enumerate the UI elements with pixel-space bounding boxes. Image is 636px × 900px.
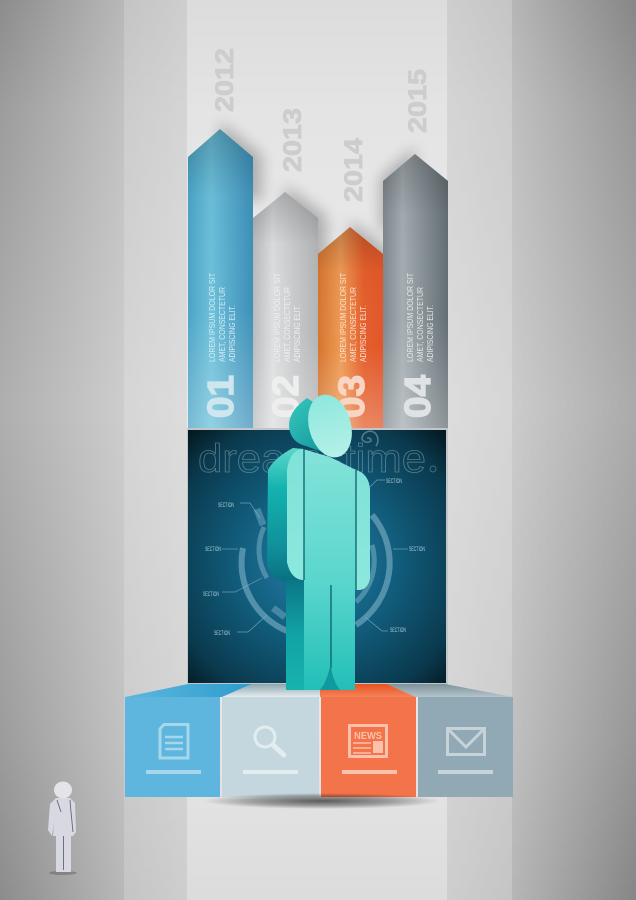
arrow 04: 04 [397,375,438,418]
arrow 03 [318,227,383,428]
arrow 02: LOREM IPSUM DOLOR SIT [273,273,282,362]
arm fronts [287,449,304,580]
section labels: SECTION [218,503,234,509]
arrow 02: ADIPISCING ELIT. [293,305,302,362]
head front [301,390,359,462]
radial diagram [222,480,408,632]
arrow 01 [188,129,253,428]
arrow shadows [220,122,415,300]
arrow 02: 02 [265,375,306,418]
arrow 04: LOREM IPSUM DOLOR SIT [406,273,415,362]
box: news [321,697,416,797]
year labels: 2014 [340,138,368,202]
arrow 02 [253,192,318,428]
arrow 02: AMET, CONSECTETUR [283,287,292,362]
year labels: 2012 [211,48,239,112]
arrow 04: AMET, CONSECTETUR [416,287,425,362]
section labels: SECTION [214,631,230,637]
arrow 01: ADIPISCING ELIT. [228,305,237,362]
arrow 01: AMET, CONSECTETUR [218,287,227,362]
platform shadow [204,793,440,809]
platform with four boxes [125,684,513,797]
arrow 03: LOREM IPSUM DOLOR SIT [339,273,348,362]
arrow 03: ADIPISCING ELIT. [359,305,368,362]
box: search [222,697,319,797]
arrow 03: 03 [331,375,372,418]
dark screen panel [187,428,448,686]
box: document [125,697,220,797]
box: mail [418,697,513,797]
year labels: 2015 [404,69,432,133]
section labels: SECTION [203,592,219,598]
small woman figure [48,782,77,875]
arm and leg sides [267,448,304,582]
body front [287,449,370,690]
head side [289,398,340,456]
box top faces [125,684,513,697]
section labels: SECTION [205,547,221,553]
box: news: NEWS [354,731,382,742]
watermark: dreamstime [198,437,426,481]
year labels [211,48,432,202]
section labels [203,479,425,637]
section labels: SECTION [390,628,406,634]
arrow 04: ADIPISCING ELIT. [426,305,435,362]
arrow 04 [383,154,448,428]
section labels: SECTION [386,479,402,485]
arrow 01: 01 [200,375,241,418]
arrow 01: LOREM IPSUM DOLOR SIT [208,273,217,362]
year labels: 2013 [279,108,307,172]
large teal person [267,390,370,690]
section labels: SECTION [409,547,425,553]
arrow 03: AMET, CONSECTETUR [349,287,358,362]
